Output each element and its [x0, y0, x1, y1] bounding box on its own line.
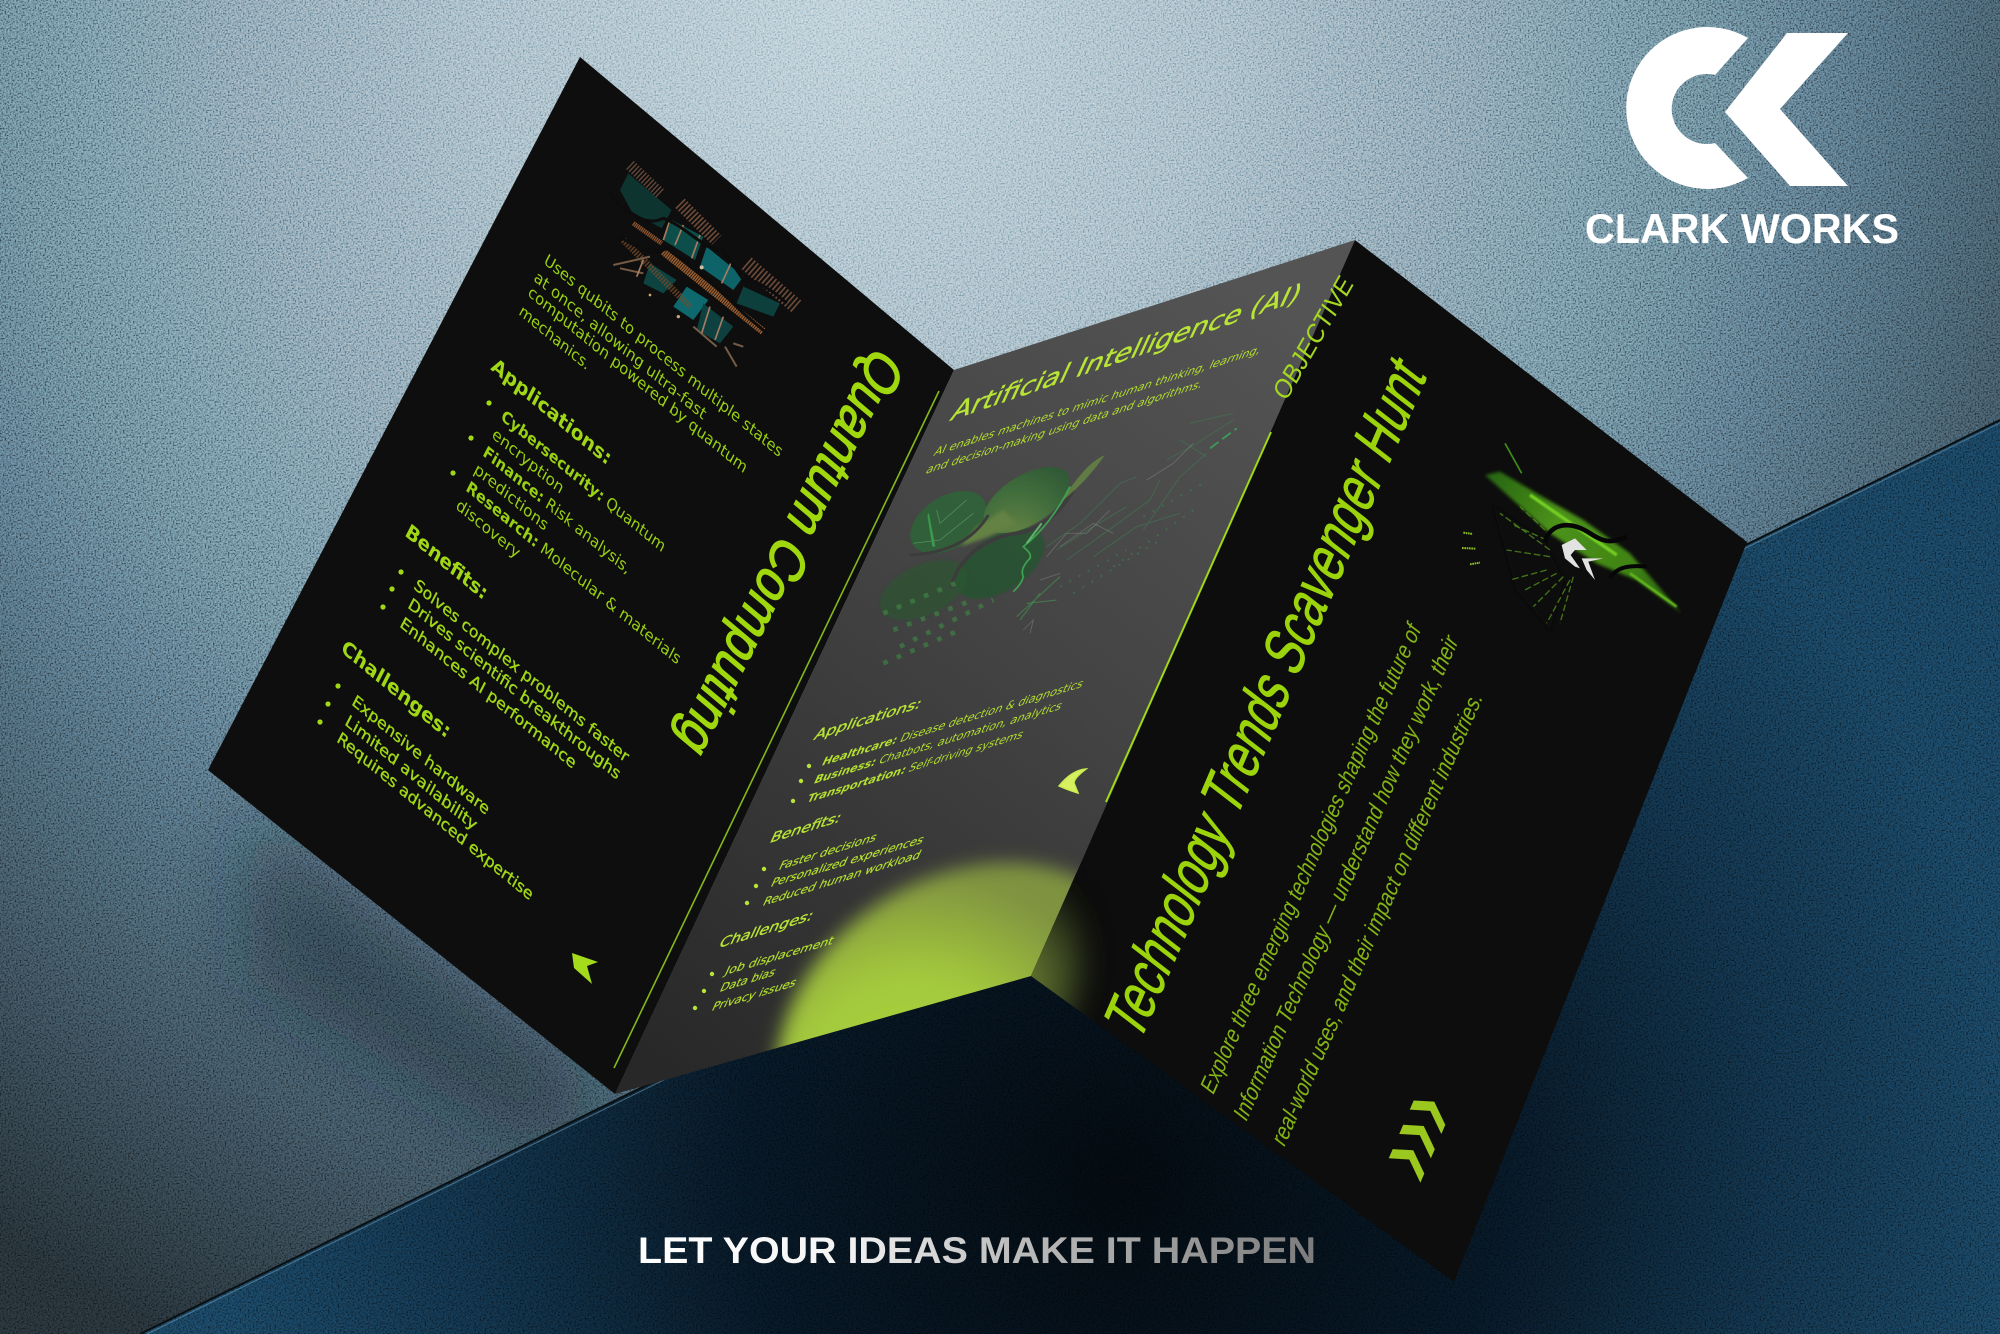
image: quantum computer [607, 165, 797, 367]
fold line: right [1106, 432, 1271, 802]
text block: objective paragraph: Explore three emerging technologies shaping the future of [1196, 617, 1426, 1100]
section: quantum challenges: Challenges: [338, 636, 454, 743]
section: quantum applications: discovery [453, 496, 523, 562]
image: green band with CK mark [1462, 443, 1682, 630]
section: AI challenges: Privacy issues [709, 976, 799, 1015]
section: AI applications [791, 677, 1086, 807]
tagline: LET YOUR IDEAS MAKE IT HAPPEN [638, 1230, 1316, 1271]
crease between wall and floor [140, 420, 2000, 1334]
text block: quantum intro: at once, allowing ultra-fast [531, 268, 709, 423]
section: AI applications: Business: Chatbots, automation, analytics [811, 699, 1065, 788]
text block: AI intro: and decision-making using data and algorithms. [923, 377, 1205, 478]
section: quantum challenges [317, 636, 536, 904]
title: Quantum Computing: Quantum Computing [666, 336, 914, 771]
section: quantum challenges: Limited availability [342, 712, 480, 834]
glow: lime circle on middle panel [764, 852, 1079, 1052]
section: AI challenges: Challenges: [716, 906, 817, 952]
section: quantum applications: Finance: Risk analysis, [480, 443, 634, 578]
fold line: left [614, 391, 939, 1068]
panel: right, Technology Trends Scavenger Hunt [1031, 240, 1747, 1282]
section: quantum applications: Applications: [488, 354, 615, 470]
logo: Clark Works [1585, 27, 1899, 252]
section: quantum benefits: Solves complex problems faster [411, 576, 632, 767]
wordmark: CLARK WORKS [1585, 205, 1899, 252]
text block: objective paragraph: real-world uses, and their impact on different industries. [1267, 685, 1488, 1152]
section: quantum applications: predictions [471, 460, 551, 535]
icon: triple chevrons [1389, 1089, 1450, 1183]
icon: mini CK mark [1562, 538, 1603, 580]
section: AI benefits [745, 808, 926, 910]
section: quantum benefits [380, 520, 632, 784]
section: AI benefits: Reduced human workload [760, 848, 923, 910]
section: AI applications: Transportation: Self-driving systems [804, 728, 1026, 807]
section: AI benefits: Personalized experiences [768, 833, 926, 891]
section: AI challenges [693, 906, 836, 1015]
icon: left chevron on quantum panel [572, 953, 598, 984]
section: AI applications: Applications: [811, 694, 925, 744]
icon: CK mark [1626, 27, 1848, 189]
text block: AI intro: AI enables machines to mimic human thinking, learning, [931, 343, 1263, 460]
heading: Artificial Intelligence (AI): Artificial Intelligence (AI) [946, 276, 1308, 427]
text block: quantum intro: Uses qubits to process multiple states [541, 251, 786, 461]
section: quantum benefits: Drives scientific breakthroughs [405, 595, 623, 784]
background: floor surface [140, 420, 2000, 1334]
section: quantum applications: Research: Molecular & materials [463, 478, 684, 668]
glow spill onto right panel [1031, 894, 1094, 1014]
panel: left, Quantum Computing [208, 57, 954, 1094]
section: AI benefits: Faster decisions [776, 831, 879, 874]
title: Technology Trends Scavenger Hunt: Technology Trends Scavenger Hunt [1093, 342, 1438, 1053]
section: quantum applications: Cybersecurity: Quantum [498, 407, 669, 556]
section: AI challenges: Data bias [717, 965, 778, 996]
image: AI artwork [870, 413, 1237, 663]
section: AI applications: Healthcare: Disease detection & diagnostics [819, 677, 1086, 770]
section: AI challenges: Job displacement [721, 934, 836, 979]
section: quantum benefits: Enhances AI performance [397, 614, 579, 773]
text block: quantum intro: mechanics. [516, 302, 593, 374]
icon: chevron on AI panel [1059, 769, 1086, 793]
panel: middle, Artificial Intelligence [615, 240, 1355, 1094]
section: quantum applications [450, 354, 684, 668]
label: OBJECTIVE: OBJECTIVE [1267, 270, 1359, 406]
section: quantum challenges: Expensive hardware [349, 692, 493, 819]
text block: objective paragraph: Information Technology — understand how they work, their [1229, 629, 1463, 1127]
section: quantum benefits: Benefits: [402, 520, 491, 605]
section: quantum applications: encryption [489, 425, 567, 498]
section: quantum challenges: Requires advanced expertise [334, 729, 536, 904]
text block: quantum intro: computation powered by quantum [525, 283, 750, 477]
shadow under brochure [250, 800, 615, 1150]
section: AI benefits: Benefits: [767, 808, 845, 847]
